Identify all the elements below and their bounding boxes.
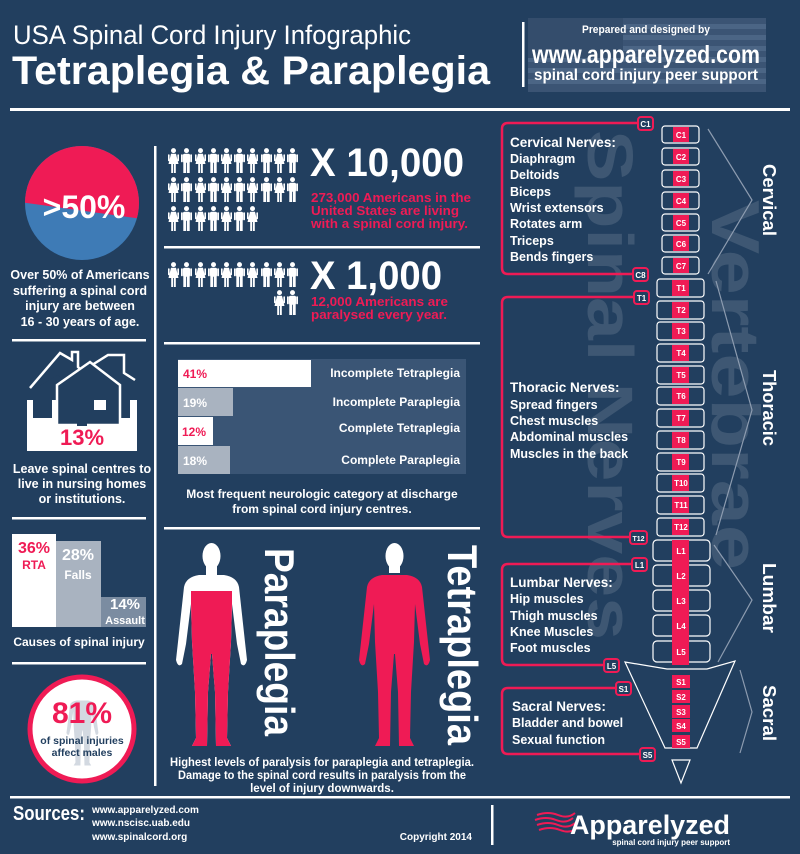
- nerve tags: S1: [619, 685, 629, 694]
- vertebrae column: C6: [676, 240, 687, 249]
- title: Tetraplegia & Paraplegia: [12, 49, 491, 93]
- footer: sources: www.spinalcord.org: [91, 832, 187, 843]
- bar chart: neurologic category: 41%: [183, 367, 207, 381]
- nerve tags: C1: [640, 120, 651, 129]
- panel: 273,000 living: 273,000 Americans in the: [311, 190, 471, 205]
- nerve text: Cervical Nerves:: [510, 135, 616, 150]
- vertebrae column: S4: [676, 722, 686, 731]
- panel: over 50% pie: 16 - 30 years of age.: [21, 315, 139, 329]
- nerve text: Thoracic Nerves:: [510, 380, 620, 395]
- region labels: Thoracic: [759, 370, 779, 446]
- vertebrae column: S2: [676, 693, 686, 702]
- nerve text: Muscles in the back: [510, 447, 628, 461]
- vertebrae column: C5: [676, 219, 687, 228]
- panel: causes of spinal injury chart: 14%: [110, 596, 140, 613]
- title: USA Spinal Cord Injury Infographic: [13, 20, 411, 50]
- vertebrae column: T7: [676, 414, 686, 423]
- panel: nursing homes 13%: or institutions.: [39, 492, 125, 506]
- nerve tags: S5: [643, 751, 653, 760]
- region chevrons: [708, 129, 752, 753]
- vertebrae column: T8: [676, 436, 686, 445]
- panel: paraplegia vs tetraplegia bodies: level of injury downwards.: [250, 783, 394, 795]
- panel: causes of spinal injury chart: RTA: [22, 558, 46, 572]
- footer: apparelyzed logo: Apparelyzed: [570, 810, 730, 840]
- nerve text: Abdominal muscles: [510, 430, 628, 444]
- nerve tags: L5: [607, 662, 617, 671]
- bar chart: neurologic category: 12%: [182, 425, 206, 439]
- icon: paraplegia body: [176, 543, 247, 746]
- panel: 273,000 living: [168, 141, 471, 231]
- footer: sources: Sources:: [13, 803, 85, 825]
- footer: sources: www.nscisc.uab.edu: [91, 818, 190, 829]
- vertebrae column: S5: [676, 738, 686, 747]
- vertebrae column: L2: [676, 572, 686, 581]
- nerve tags: C8: [635, 271, 646, 280]
- nerve text: Knee Muscles: [510, 625, 593, 639]
- vertebrae column: C2: [676, 153, 687, 162]
- nerve text: Thigh muscles: [510, 609, 598, 623]
- region labels: Sacral: [759, 685, 779, 741]
- bar chart: neurologic category: Complete Tetraplegia: [339, 421, 460, 435]
- panel: paraplegia vs tetraplegia bodies: Damage to the spinal cord results in paralysis from the: [178, 770, 466, 782]
- panel: causes of spinal injury chart: Causes of spinal injury: [13, 635, 145, 649]
- nerve text: Bends fingers: [510, 250, 593, 264]
- nerve brackets: [502, 123, 645, 754]
- panel: over 50% pie: [10, 140, 150, 329]
- panel: 273,000 living: United States are living: [311, 203, 459, 218]
- header credit: apparelyzed: Prepared and designed by: [582, 24, 711, 36]
- nerve tags: T1: [637, 294, 647, 303]
- vertebrae column: L1: [676, 547, 686, 556]
- panel: causes of spinal injury chart: 28%: [62, 547, 94, 564]
- watermark text: [574, 130, 773, 640]
- vertebrae column: S1: [676, 678, 686, 687]
- bar chart: neurologic category: 18%: [183, 454, 207, 468]
- vertebrae column: T5: [676, 371, 686, 380]
- panel: paraplegia vs tetraplegia bodies: Tetraplegia: [439, 545, 486, 746]
- bar chart: neurologic category: 19%: [183, 396, 207, 410]
- panel: 81% males: affect males: [52, 747, 113, 759]
- panel: paraplegia vs tetraplegia bodies: Paraplegia: [256, 548, 303, 737]
- nerve text: Wrist extensors: [510, 201, 604, 215]
- panel: nursing homes 13%: live in nursing homes: [18, 477, 146, 491]
- panel: nursing homes 13%: Leave spinal centres to: [13, 462, 151, 476]
- bar chart: neurologic category: Incomplete Tetraplegia: [330, 366, 460, 380]
- panel: 12,000 paralysed: [168, 254, 448, 322]
- nerve text: Rotates arm: [510, 217, 582, 231]
- nerve text: Deltoids: [510, 168, 559, 182]
- vertebrae column: T3: [676, 327, 686, 336]
- icon: people x1000: [168, 262, 298, 315]
- panel: 81% males: 81%: [52, 697, 112, 730]
- nerve text: Triceps: [510, 234, 554, 248]
- panel: 12,000 paralysed: 12,000 Americans are: [311, 294, 448, 309]
- panel: 12,000 paralysed: X 1,000: [310, 254, 442, 298]
- panel: 81% males: [30, 677, 134, 781]
- panel: paraplegia vs tetraplegia bodies: [170, 543, 486, 795]
- nerve text: Spread fingers: [510, 398, 598, 412]
- nerve text: Diaphragm: [510, 152, 575, 166]
- nerve tags: T12: [632, 536, 645, 543]
- nerve text: Chest muscles: [510, 414, 598, 428]
- footer: apparelyzed logo: [535, 810, 730, 847]
- vertebrae column: T6: [676, 392, 686, 401]
- panel: 81% males: of spinal injuries: [40, 735, 124, 747]
- title: [12, 20, 491, 93]
- bar chart: neurologic category: Complete Paraplegia: [341, 453, 460, 467]
- vertebrae column: T11: [674, 501, 688, 510]
- footer: sources: www.apparelyzed.com: [91, 805, 199, 816]
- nerve tags: L1: [635, 561, 645, 570]
- bar chart: neurologic category: Incomplete Paraplegia: [333, 395, 460, 409]
- bar chart: neurologic category: from spinal cord injury centres.: [232, 502, 412, 516]
- vertebrae column: T10: [674, 479, 688, 488]
- panel: spine diagram: [502, 117, 779, 783]
- panel: 273,000 living: X 10,000: [310, 141, 464, 185]
- vertebrae column: T4: [676, 349, 686, 358]
- nerve text: Sacral Nerves:: [512, 699, 606, 714]
- bar chart: neurologic category: [178, 359, 466, 516]
- footer: apparelyzed logo: spinal cord injury peer support: [612, 838, 730, 847]
- nerve text: Biceps: [510, 185, 551, 199]
- vertebrae column: T12: [674, 523, 688, 532]
- vertebrae column: T2: [676, 306, 686, 315]
- bar chart: neurologic category: Most frequent neurologic category at discharge: [186, 487, 458, 501]
- panel: causes of spinal injury chart: [12, 534, 146, 649]
- icon: houses: [27, 352, 137, 451]
- vertebrae column: S3: [676, 708, 686, 717]
- panel: paraplegia vs tetraplegia bodies: Highest levels of paralysis for paraplegia and tetraplegia.: [170, 757, 474, 769]
- nerve text: [510, 135, 628, 747]
- panel: over 50% pie: suffering a spinal cord: [13, 284, 147, 298]
- footer: sources: [13, 803, 472, 843]
- vertebrae column: C1: [676, 131, 687, 140]
- vertebrae column: L3: [676, 597, 686, 606]
- vertebrae column: T9: [676, 458, 686, 467]
- vertebrae column: C3: [676, 175, 687, 184]
- vertebrae column: [625, 126, 735, 783]
- watermark text: Spinal Nerves: [574, 130, 646, 640]
- header credit: apparelyzed: [528, 18, 766, 92]
- panel: 273,000 living: with a spinal cord injury.: [310, 216, 468, 231]
- footer: sources: Copyright 2014: [400, 832, 472, 843]
- watermark text: Vertebrae: [697, 200, 773, 570]
- vertebrae column: L4: [676, 622, 686, 631]
- region labels: Cervical: [759, 164, 779, 236]
- panel: causes of spinal injury chart: Falls: [64, 568, 92, 582]
- nerve text: Hip muscles: [510, 592, 584, 606]
- nerve text: Sexual function: [512, 733, 605, 747]
- region labels: [759, 164, 779, 741]
- vertebrae column: L5: [676, 648, 686, 657]
- nerve tags: [604, 117, 655, 761]
- nerve text: Bladder and bowel: [512, 716, 623, 730]
- panel: causes of spinal injury chart: 36%: [18, 540, 50, 557]
- panel: 12,000 paralysed: paralysed every year.: [311, 307, 447, 322]
- vertebrae column: C4: [676, 197, 687, 206]
- icon: people x10000: [168, 148, 298, 231]
- panel: nursing homes 13%: 13%: [60, 425, 104, 450]
- region labels: Lumbar: [759, 563, 779, 633]
- nerve text: Foot muscles: [510, 641, 591, 655]
- header credit: apparelyzed: www.apparelyzed.com: [531, 41, 760, 69]
- icon: tetraplegia body: [359, 543, 430, 746]
- panel: over 50% pie: Over 50% of Americans: [10, 268, 150, 282]
- vertebrae column: T1: [676, 284, 686, 293]
- panel: over 50% pie: >50%: [43, 189, 125, 225]
- vertebrae column: C7: [676, 262, 687, 271]
- panel: causes of spinal injury chart: Assault: [105, 615, 145, 627]
- header credit: apparelyzed: spinal cord injury peer support: [534, 67, 759, 84]
- panel: over 50% pie: injury are between: [25, 299, 135, 313]
- nerve text: Lumbar Nerves:: [510, 575, 613, 590]
- panel: nursing homes 13%: [13, 352, 151, 506]
